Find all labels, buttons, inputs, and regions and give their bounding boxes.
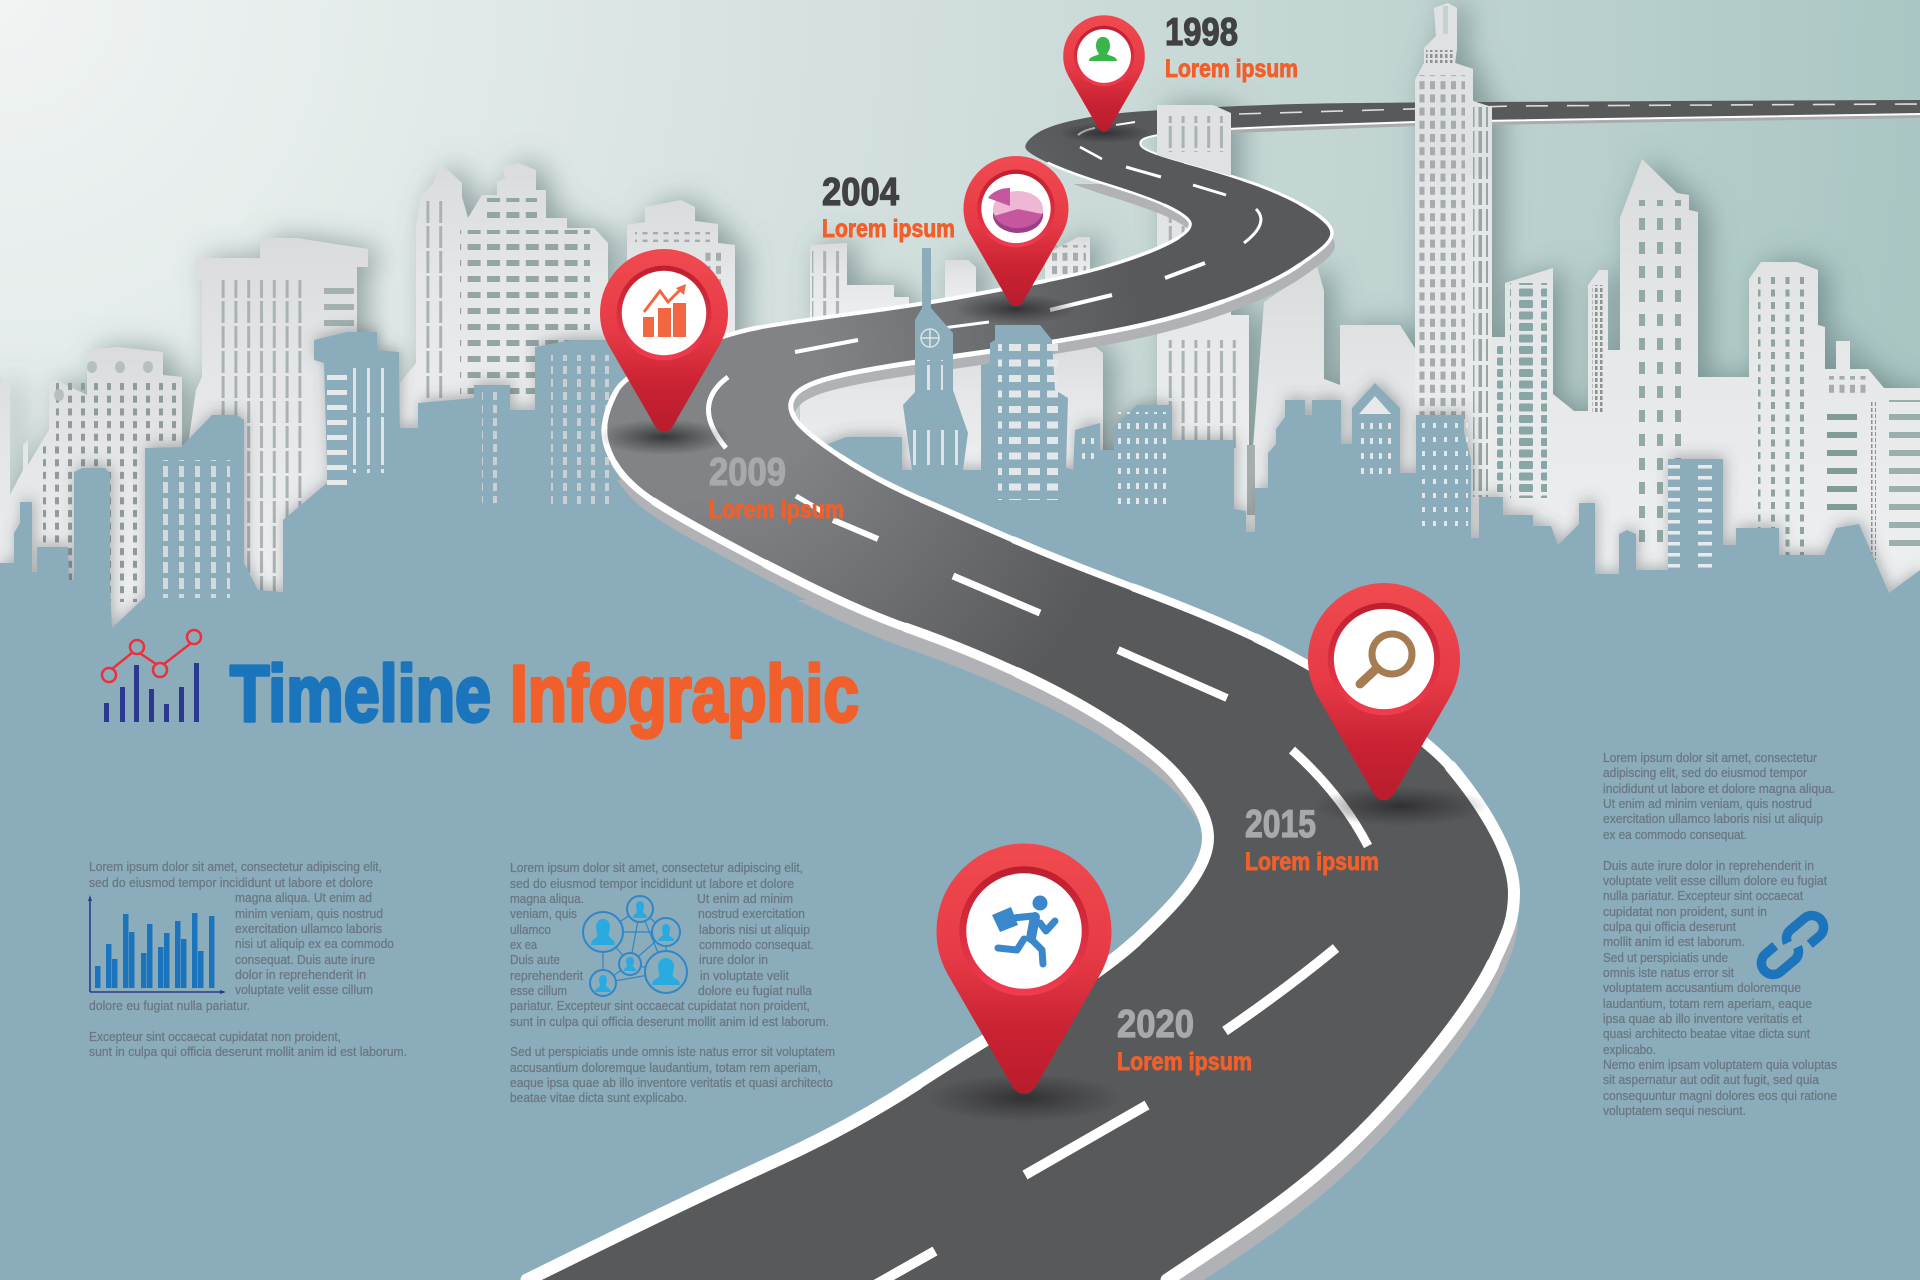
label 2004 xyxy=(822,171,955,243)
label 2015 xyxy=(1245,803,1379,876)
text column: left: sunt in culpa qui officia deserunt mollit anim id est laborum. xyxy=(89,1044,407,1059)
text column: right: Sed ut perspiciatis unde xyxy=(1603,950,1728,965)
label 2020: Lorem ipsum xyxy=(1117,1048,1252,1076)
text column: right: ipsa quae ab illo inventore veritatis et xyxy=(1603,1011,1802,1026)
title: Timeline xyxy=(230,649,491,738)
text column: middle: in voluptate velit xyxy=(700,968,789,983)
label 2015: 2015 xyxy=(1245,803,1316,846)
text column: right: omnis iste natus error sit xyxy=(1603,965,1734,980)
text column: middle: veniam, quis xyxy=(510,906,577,921)
text column: right: culpa qui officia deserunt xyxy=(1603,919,1736,934)
road surface xyxy=(527,100,1920,1280)
text column: left: Lorem ipsum dolor sit amet, consectetur adipiscing elit, xyxy=(89,859,382,874)
title: Infographic xyxy=(510,649,859,738)
text column: right xyxy=(1603,750,1837,1118)
blue front building xyxy=(981,325,1068,505)
text column: middle: sed do eiusmod tempor incididunt ut labore et dolore xyxy=(510,876,794,891)
text column: right: cupidatat non proident, sunt in xyxy=(1603,904,1767,919)
label 2009 xyxy=(709,451,844,524)
front buildings over the road xyxy=(903,3,1492,505)
text column: middle: Sed ut perspiciatis unde omnis iste natus error sit voluptatem xyxy=(510,1044,835,1059)
pin 1998 with person icon xyxy=(1063,15,1145,132)
text column: left: dolore eu fugiat nulla pariatur. xyxy=(89,998,250,1013)
pin 2004 with pie chart icon xyxy=(964,156,1068,306)
text column: left: nisi ut aliquip ex ea commodo xyxy=(235,936,394,951)
pin shadows on road xyxy=(598,123,1488,1122)
text column: right: Ut enim ad minim veniam, quis nostrud xyxy=(1603,796,1812,811)
road side thickness xyxy=(614,184,1518,1280)
far road side xyxy=(1233,116,1920,131)
text column: right: adipiscing elit, sed do eiusmod tempor xyxy=(1603,765,1808,780)
road white edge lines xyxy=(527,114,1920,1280)
text column: left: dolor in reprehenderit in xyxy=(235,967,366,982)
blue clock tower xyxy=(903,248,968,470)
text column: middle: commodo consequat. xyxy=(699,937,814,952)
icon: title chart with trend line xyxy=(102,630,201,722)
text column: middle: ex ea xyxy=(510,937,538,952)
text column: middle: pariatur. Excepteur sint occaecat cupidatat non proident, xyxy=(510,998,810,1013)
icon: pie chart xyxy=(988,188,1043,233)
text column: right: Nemo enim ipsam voluptatem quia voluptas xyxy=(1603,1057,1837,1072)
pin 2009 with growth chart icon xyxy=(600,249,728,432)
winding road xyxy=(527,100,1920,1280)
windows on white buildings xyxy=(43,75,1920,602)
text column: middle: eaque ipsa quae ab illo inventore veritatis et quasi architecto xyxy=(510,1075,833,1090)
text column: right: exercitation ullamco laboris nisi ut aliquip xyxy=(1603,811,1823,826)
text column: right: voluptatem sequi nesciunt. xyxy=(1603,1103,1746,1118)
icon: running businessman xyxy=(992,896,1055,964)
text column: middle: dolore eu fugiat nulla xyxy=(698,983,813,998)
pin 2015 with magnifier icon xyxy=(1308,583,1460,800)
text column: right: mollit anim id est laborum. xyxy=(1603,934,1745,949)
text column: middle: irure dolor in xyxy=(699,952,768,967)
road centre dashes xyxy=(708,104,1920,1280)
label 2009: 2009 xyxy=(709,451,786,494)
label 2004: 2004 xyxy=(822,171,899,214)
text column: middle: esse cillum xyxy=(510,983,567,998)
text column: right: Duis aute irure dolor in reprehenderit in xyxy=(1603,858,1814,873)
text column: middle: beatae vitae dicta sunt explicabo. xyxy=(510,1090,687,1105)
label 1998 xyxy=(1165,11,1298,83)
tall tower top xyxy=(1415,3,1492,175)
icon: people network xyxy=(583,896,687,996)
text column: left: consequat. Duis aute irure xyxy=(235,952,375,967)
text column: middle: nostrud exercitation xyxy=(698,906,805,921)
text column: left: sed do eiusmod tempor incididunt ut labore et dolore xyxy=(89,875,373,890)
text column: left: Excepteur sint occaecat cupidatat non proident, xyxy=(89,1029,341,1044)
text column: middle: magna aliqua. xyxy=(510,891,584,906)
label 2009: Lorem ipsum xyxy=(709,496,844,524)
label 2015: Lorem ipsum xyxy=(1245,848,1379,876)
text column: left: magna aliqua. Ut enim ad xyxy=(235,890,372,905)
building over far road xyxy=(1157,105,1231,176)
label 1998: Lorem ipsum xyxy=(1165,55,1298,83)
text column: right: voluptate velit esse cillum dolore eu fugiat xyxy=(1603,873,1827,888)
label 2020: 2020 xyxy=(1117,1003,1194,1046)
text column: left xyxy=(89,859,407,1059)
icon: bar chart xyxy=(88,895,226,994)
text column: right: quasi architecto beatae vitae dicta sunt xyxy=(1603,1026,1810,1041)
text column: middle: reprehenderit xyxy=(510,968,583,983)
text column: middle: sunt in culpa qui officia deserunt mollit anim id est laborum. xyxy=(510,1014,829,1029)
text column: middle xyxy=(510,860,835,1105)
label 1998: 1998 xyxy=(1165,11,1238,54)
blue ground silhouette xyxy=(0,332,1920,1280)
text column: right: ex ea commodo consequat. xyxy=(1603,827,1747,842)
label 2004: Lorem ipsum xyxy=(822,215,955,243)
icon: magnifying glass xyxy=(1360,634,1412,684)
text column: middle: Lorem ipsum dolor sit amet, consectetur adipiscing elit, xyxy=(510,860,803,875)
text column: right: incididunt ut labore et dolore magna aliqua. xyxy=(1603,781,1835,796)
text column: right: nulla pariatur. Excepteur sint occaecat xyxy=(1603,888,1803,903)
text column: left: exercitation ullamco laboris xyxy=(235,921,382,936)
text column: right: laudantium, totam rem aperiam, eaque xyxy=(1603,996,1812,1011)
back skyline: paper-cut white buildings xyxy=(0,3,1920,660)
icon: rising bar chart xyxy=(643,284,686,337)
text column: left: minim veniam, quis nostrud xyxy=(235,906,383,921)
label 2020 xyxy=(1117,1003,1252,1076)
text column: left: voluptate velit esse cillum xyxy=(235,982,373,997)
pin 2020 with running man icon xyxy=(936,844,1112,1094)
text column: right: sit aspernatur aut odit aut fugit, sed quia xyxy=(1603,1072,1820,1087)
text column: middle: ullamco xyxy=(510,922,551,937)
text column: right: explicabo. xyxy=(1603,1042,1656,1057)
text column: middle: Duis aute xyxy=(510,952,560,967)
title xyxy=(230,649,859,738)
blue building windows xyxy=(158,355,1722,598)
foreground blue skyline and ground xyxy=(0,332,1920,1280)
text column: middle: accusantium doloremque laudantium, totam rem aperiam, xyxy=(510,1060,821,1075)
white building masses xyxy=(0,3,1920,660)
text column: right: consequuntur magni dolores eos qui ratione xyxy=(1603,1088,1837,1103)
text column: right: Lorem ipsum dolor sit amet, consectetur xyxy=(1603,750,1818,765)
icon: chain link xyxy=(1757,911,1828,979)
text column: middle: Ut enim ad minim xyxy=(697,891,793,906)
milestone labels xyxy=(709,11,1379,1076)
icon: person xyxy=(1089,37,1117,61)
text column: right: voluptatem accusantium doloremque xyxy=(1603,980,1801,995)
text column: middle: laboris nisi ut aliquip xyxy=(699,922,810,937)
